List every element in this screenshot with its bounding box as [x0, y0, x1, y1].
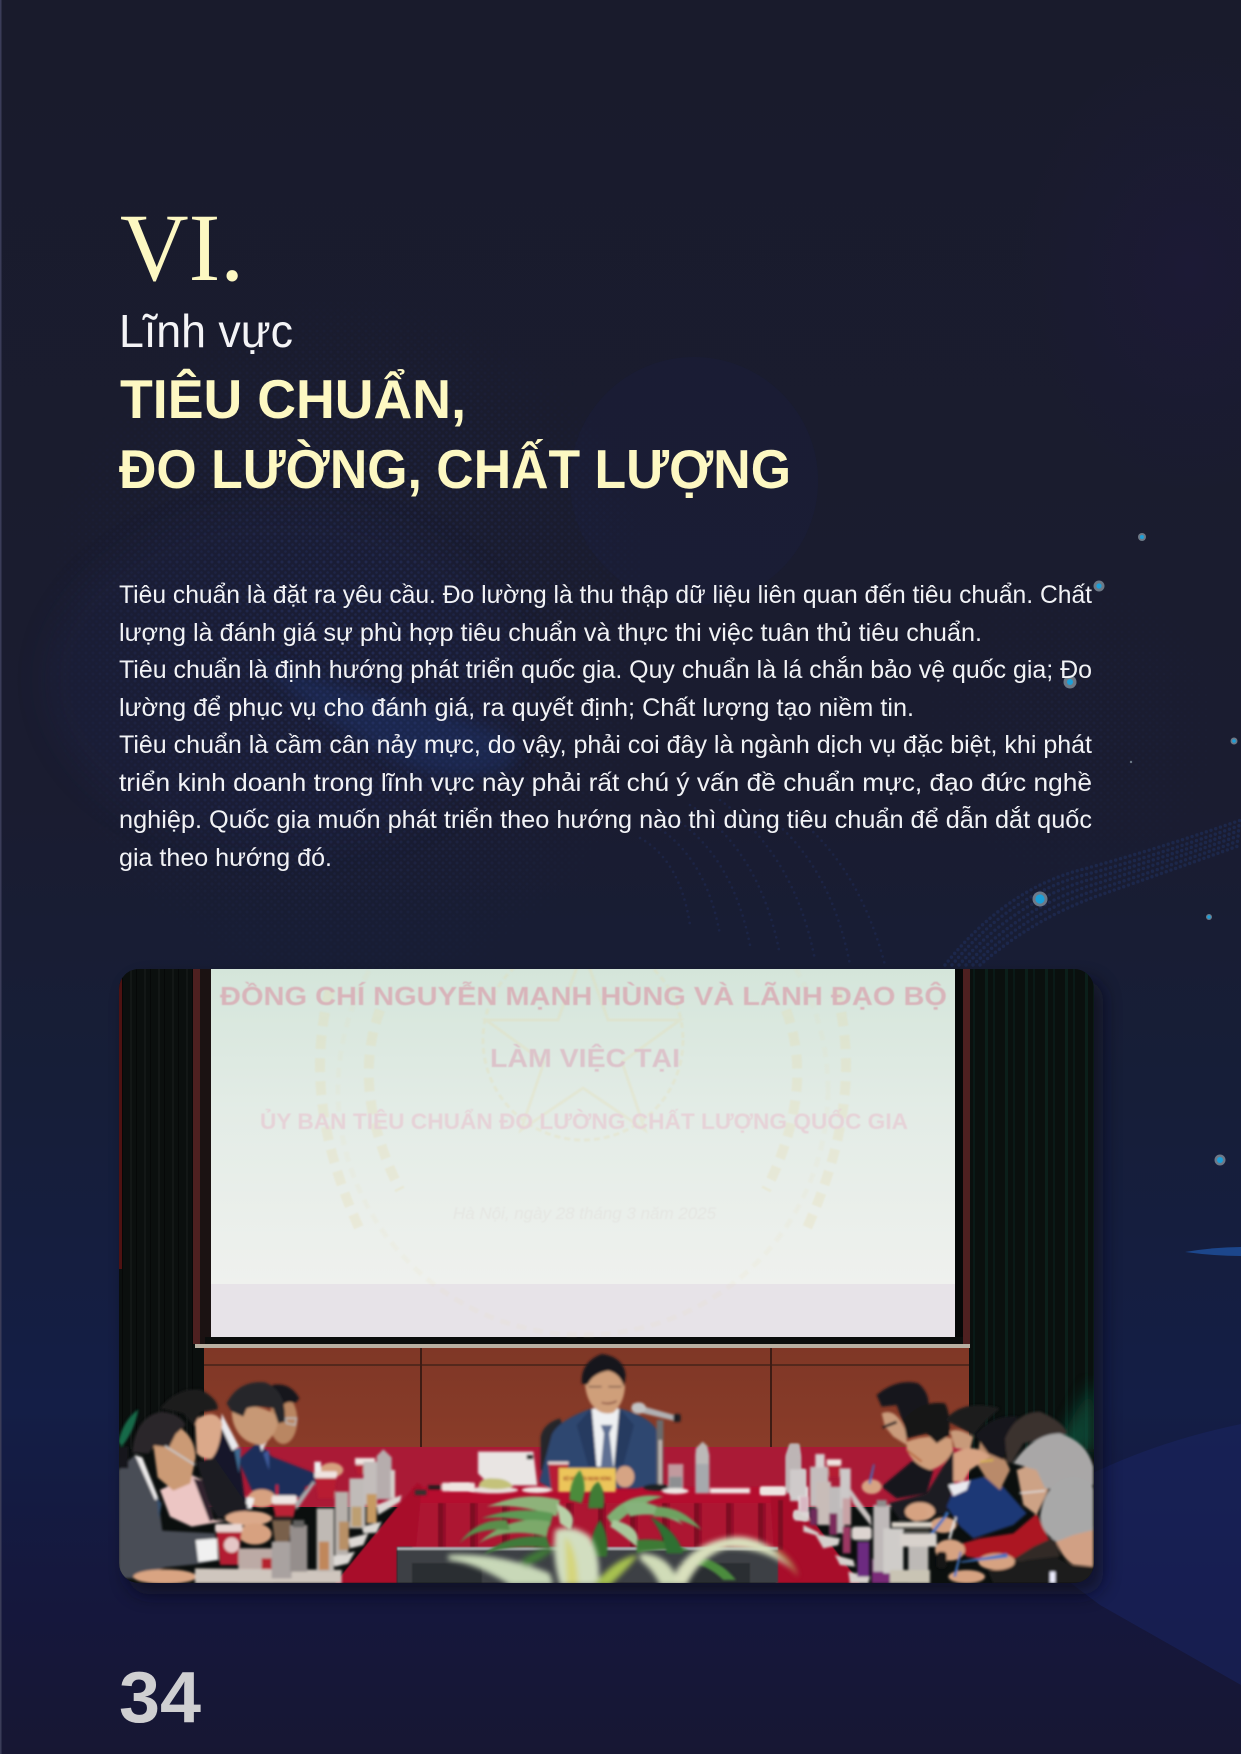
- head: [585, 1367, 625, 1414]
- curtain: left: [119, 969, 211, 1344]
- near bottles: [852, 1500, 937, 1583]
- man R1: [862, 1382, 933, 1498]
- chair: [541, 1418, 563, 1473]
- page number: 34: [119, 1658, 201, 1738]
- man R3: [945, 1405, 1000, 1450]
- microphone: [631, 1402, 681, 1491]
- monitors: [397, 1547, 778, 1583]
- plant leaves: [459, 1470, 736, 1580]
- man R2: [888, 1403, 957, 1521]
- cups: [215, 1458, 375, 1565]
- screen text: Hà Nội, ngày 28 tháng 3 năm 2025: [453, 1204, 717, 1223]
- hands and pens: [868, 1464, 1015, 1583]
- body text block: lường để phục vụ cho đánh giá, ra quyết định; Chất lượng tạo niềm tin.: [119, 694, 914, 722]
- suit: [539, 1408, 659, 1488]
- body text block: lượng là đánh giá sự phù hợp tiêu chuẩn và thực thi việc tuân thủ tiêu chuẩn.: [119, 619, 982, 647]
- plant in foreground: [448, 1470, 798, 1585]
- glass and bottle: [668, 1464, 683, 1490]
- fruit plate: [468, 1487, 518, 1493]
- body text block: Tiêu chuẩn là đặt ra yêu cầu. Đo lường là thu thập dữ liệu liên quan đến tiêu chuẩn. Chất: [119, 581, 1092, 609]
- man R4: [947, 1416, 1027, 1538]
- tables: [335, 1483, 860, 1583]
- heading: main title: [119, 368, 791, 500]
- heading: main title: ĐO LƯỜNG, CHẤT LƯỢNG: [119, 438, 791, 500]
- people: left side of table: [118, 1382, 475, 1584]
- woman: [160, 1389, 272, 1527]
- screen text: ỦY BAN TIÊU CHUẨN ĐO LƯỜNG CHẤT LƯỢNG QUỐC GIA: [260, 1108, 908, 1134]
- heading: main title: TIÊU CHUẨN,: [120, 368, 466, 430]
- body text block: [119, 581, 1092, 872]
- body text block: triển kinh doanh trong lĩnh vực này phải rất chú ý vấn đề chuẩn mực, đạo đức nghề: [119, 769, 1092, 797]
- wall rail and wood panels: [195, 1344, 970, 1450]
- person R5: [957, 1412, 1067, 1563]
- person R6: [1007, 1433, 1093, 1563]
- man 1: [118, 1412, 272, 1584]
- napkin items: [442, 1483, 475, 1491]
- far bottles: [786, 1444, 801, 1493]
- plant behind: [118, 1409, 138, 1447]
- projection screen: [205, 969, 955, 1344]
- screen emblem: [315, 969, 851, 1338]
- people: centre speaker and desk items: [450, 1354, 810, 1521]
- name placard: [559, 1468, 616, 1492]
- bottles and placards: [195, 1449, 402, 1583]
- blurred foreground leaves: [448, 1528, 798, 1585]
- bottles on right table: [760, 1444, 893, 1583]
- man 3: [205, 1382, 285, 1518]
- people: centre speaker and desk items: BỘ NGUYỄN MẠNH HÙNG: [563, 1474, 612, 1482]
- body text block: nghiệp. Quốc gia muốn phát triển theo hướng nào thì dùng tiêu chuẩn để dẫn dắt quốc: [119, 805, 1092, 834]
- screen text: ĐỒNG CHÍ NGUYỄN MẠNH HÙNG VÀ LÃNH ĐẠO BỘ: [220, 981, 947, 1011]
- photo drop shadow: [128, 980, 1103, 1594]
- body text block: Tiêu chuẩn là định hướng phát triển quốc gia. Quy chuẩn là lá chắn bảo vệ quốc gia; Đo: [119, 655, 1092, 684]
- red table back: [204, 1447, 969, 1507]
- photo: meeting room: [119, 969, 1094, 1583]
- tablet: [478, 1452, 537, 1485]
- body text block: gia theo hướng đó.: [119, 844, 332, 872]
- heading: field label: Lĩnh vực: [119, 305, 293, 357]
- section number: VI.: [120, 194, 244, 301]
- hand: [616, 1466, 634, 1487]
- man 4: [238, 1384, 343, 1497]
- curtain: right: [955, 969, 1094, 1452]
- body text block: Tiêu chuẩn là cầm cân nảy mực, do vậy, phải coi đây là ngành dịch vụ đặc biệt, khi phát: [119, 731, 1092, 759]
- red cup: [548, 1463, 568, 1492]
- people: right side of table: [760, 1382, 1093, 1583]
- screen text: LÀM VIỆC TẠI: [490, 1043, 680, 1073]
- decorative glowing dots: [1032, 533, 1241, 1256]
- screen text: [220, 981, 947, 1223]
- person R7: [988, 1477, 1093, 1583]
